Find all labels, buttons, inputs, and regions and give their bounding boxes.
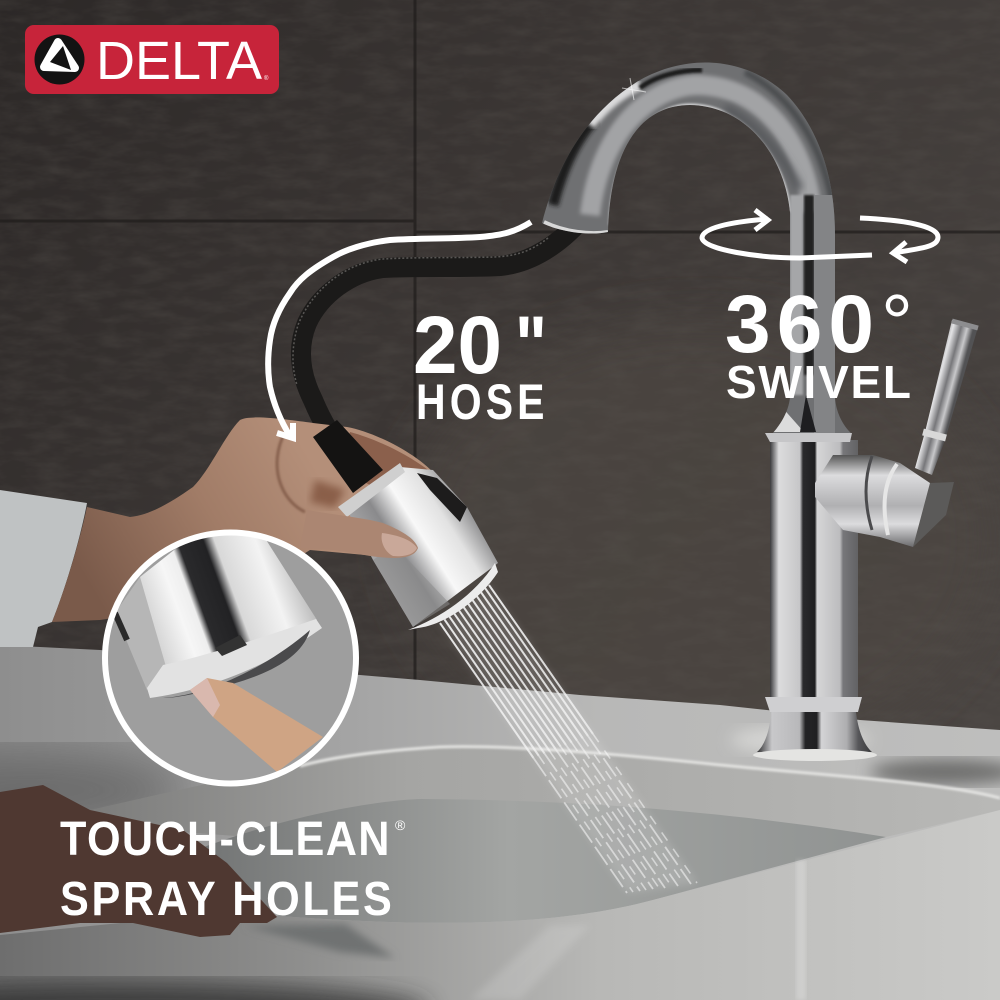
callout: 20 inch hose: " <box>515 300 547 391</box>
sleeve <box>0 490 87 647</box>
arrow: hose length <box>268 222 531 436</box>
callout: 20 inch hose: 20 <box>413 300 502 391</box>
hand holding sprayer <box>0 417 437 647</box>
countertop <box>0 645 1000 1000</box>
callout: touch-clean spray holes: TOUCH-CLEAN <box>60 812 391 866</box>
callout: touch-clean spray holes: ® <box>395 817 406 833</box>
logo: Delta: DELTA <box>96 31 262 91</box>
sprayer head <box>338 463 498 630</box>
sink basin <box>0 746 1000 1000</box>
callout: 360 swivel <box>725 278 913 408</box>
callout: touch-clean spray holes: SPRAY HOLES <box>60 872 395 926</box>
logo: Delta <box>25 25 279 94</box>
faucet handle <box>915 320 978 475</box>
faucet top collar <box>765 433 852 442</box>
callout: 360 swivel: 360 <box>725 279 874 370</box>
faucet <box>542 62 978 761</box>
hand on sink edge <box>0 785 277 937</box>
faucet base <box>753 697 877 761</box>
hose <box>293 215 585 430</box>
callout: 20 inch hose <box>413 300 549 430</box>
hand <box>52 417 437 622</box>
swivel arrows <box>702 210 938 262</box>
logo mark <box>34 34 84 84</box>
callout: 360 swivel: SWIVEL <box>726 356 911 408</box>
sprayer connector <box>313 420 383 493</box>
callout: 360 swivel: ° <box>881 278 913 367</box>
arrow head <box>277 423 293 438</box>
inset: touch-clean spray holes <box>105 532 356 784</box>
faucet spout arc <box>542 62 852 435</box>
water spray <box>440 585 697 893</box>
callout: touch-clean spray holes <box>60 812 406 926</box>
callout: 20 inch hose: HOSE <box>416 374 549 430</box>
logo: Delta: ® <box>264 75 269 82</box>
faucet lever housing <box>815 455 954 547</box>
background: tiled wall <box>0 0 1000 760</box>
faucet column <box>770 440 858 700</box>
thumb <box>300 510 418 558</box>
